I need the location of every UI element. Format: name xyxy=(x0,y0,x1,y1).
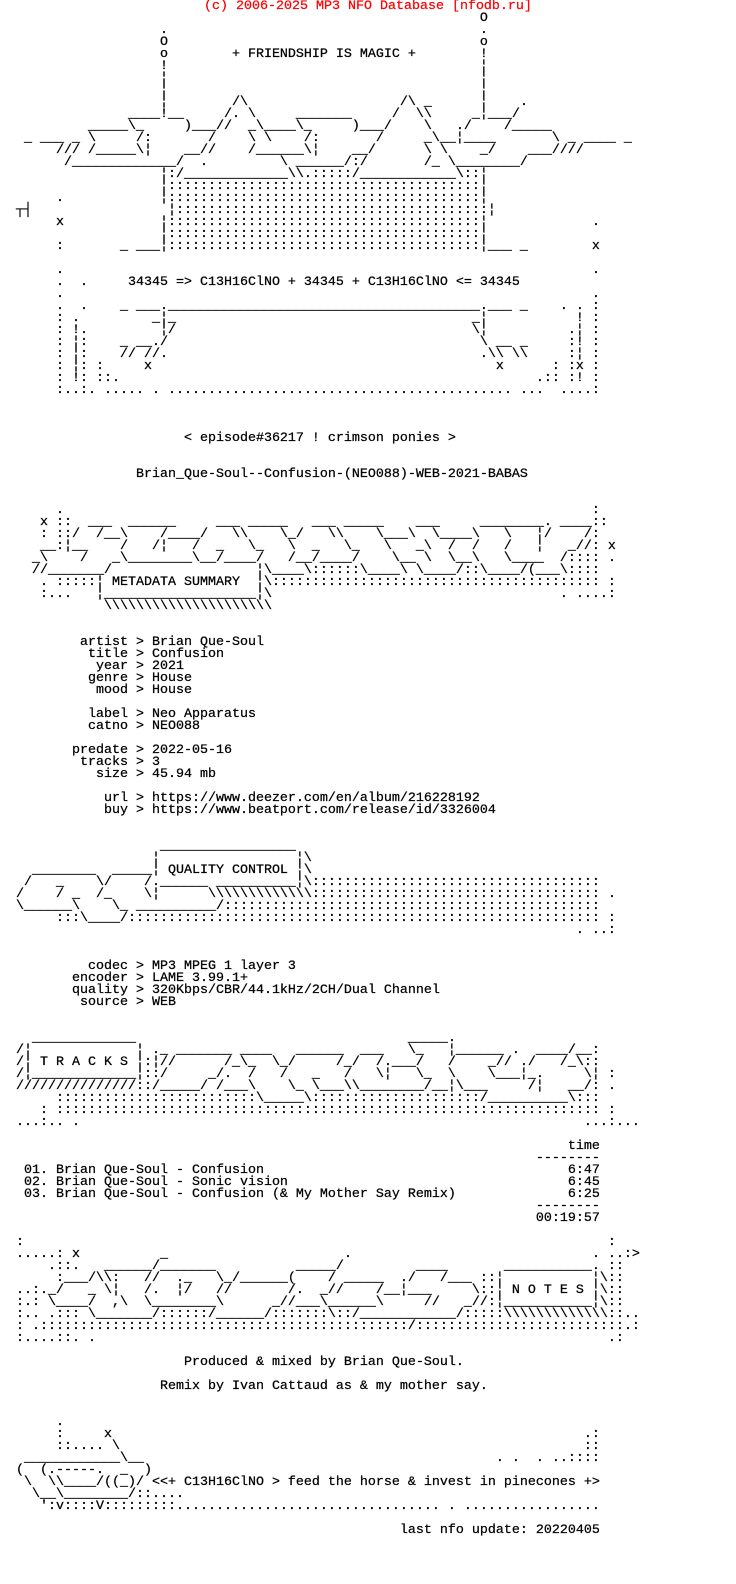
banner: metadata summary: . : x :: ___ ______ ___ _____ ___ _____ ___ ________. ____:: : ::/ /__\ /____/ \\ \_/ \\ \___\ \____\ \ ¦/ /: __:¦__ / /¦ / _ \_ \ _ \_ \ _\ / / / ¦ _//: x _\ / _\________\__/____/ /__/____/ \__ \ \__\ \____ /:::: . //_______/ ¦\____\::::::\____\ \____/::\____/(___\:::: . :::::¦ METADATA SUMMARY ¦\::::::::::::::::::::::::::::::::::::::::: : :... ¦___________________¦\ . ....: \\\\\\\\\\\\\\\\\\\\\ xyxy=(0,503,616,614)
text: last update: last nfo update: 20220405 xyxy=(400,1523,600,1538)
ascii logo: friendship is magic castle with formula: O . . O o o + FRIENDSHIP IS MAGIC + ! ! ¦ ¦ ¦ ¦ ¦ ¦ /\ /\ _ ¦ . ____!__ /. \ _______ / \\ _¦___/ _____\_ )___// _\____\_ )___/ \ ./ /_____ _ ___ _ \ /: / \ \ /: / _\__¦____ \ _ ____ _ /// /_____\¦ __// /______\¦ __/ \ \ _/ ___//// /_____________/ . \ ______/:/ /_ \________/ ¦:/_____________\\.:::::/____________\::¦ ¦:::::::::::::::::::::::::::::::::::::::¦ . ¦:::::::::::::::::::::::::::::::::::::::¦ ┬┤ ¦:::::::::::::::::::::::::::::::::::::::¦ x ¦:::::::::::::::::::::::::::::::::::::::¦ . ¦:::::::::::::::::::::::::::::::::::::::¦ : _ ___¦:::::::::::::::::::::::::::::::::::::::¦___ _ x . . . . 34345 => C13H16ClNO + 34345 + C13H16ClNO <= 34345 . . . . _ ___._______________________________________.___ _ . . : : . _¦_ _¦ ! : : !. ¦/ \¦ .¦ : : ¦: _ __./ \ __ _ :! : : ¦: // //. .\\ \\ :¦ : : ¦: : x x : :x : : !: ::. .:: :! : :..:. ..... . ........................................... ... ....: xyxy=(0,11,632,398)
quality details: codec > MP3 MPEG 1 layer 3 encoder > LAME 3.99.1+ quality > 320Kbps/CBR/44.1kHz/2CH/Dual Channel source > WEB xyxy=(0,959,440,1010)
text: release name: Brian_Que-Soul--Confusion-(NEO088)-WEB-2021-BABAS xyxy=(136,467,528,482)
banner: notes: : : .....: x _ . . ..:> .::. ______/_______ _____/ ____ ___________. :: :___/\\: // ._ \_/______( / _____ ./ /___ ::¦ ¦\:: ..:._/ _ \¦ /. ¦/ // /. _// /__¦___ \::¦ N O T E S ¦\:: :.: \____/ ,\ \________\ _//___\______\ // _//:¦___________¦\:: :.. .::: \_______/::::::/______/:::::::\::/____________/:::::\\\\\\\\\\\\\::.. : .::::::::::::::::::::::::::::::::::::::::::::::/::::::::::::::::::::::::::.: :....::. . .: xyxy=(0,1235,640,1346)
banner: quality control: _________________ ¦ ¦\ ________ _____¦ QUALITY CONTROL ¦\ / _ \/ /.______ __________¦\:::::::::::::::::::::::::::::::::::: / / _ /_ \¦ \\\\\\\\\\\\\:::::::::::::::::::::::::::::::::::: . \______\ \_ __________/::::::::::::::::::::::::::::::::::::::::::::::: :::\____/::::::::::::::::::::::::::::::::::::::::::::::::::::::::::: : . ..: xyxy=(0,839,616,938)
text: remix credit: Remix by Ivan Cattaud as & my mother say. xyxy=(160,1379,488,1394)
metadata list: artist > Brian Que-Soul title > Confusion year > 2021 genre > House mood > House label > Neo Apparatus catno > NEO088 predate > 2022-05-16 tracks > 3 size > 45.94 mb url > https://www.deezer.com/en/album/216228192 buy > https://www.beatport.com/release/id/3326004 xyxy=(0,635,496,818)
text: production credits: Produced & mixed by Brian Que-Soul. xyxy=(184,1355,464,1370)
banner: tracks: _____________ _____. /¦ ¦ ._ _______ ____ ______ ___ \_ ¦______ . ____/__: /¦ T R A C K S ¦:¦// /_\_ \_/ /_/ /.___/ / _// ./ /_\:: /¦_____________¦::/ _/. / / _ / \¦ \_ \ \___¦_. \¦ : ///////////////::/_____/ /___\ \_ \___\\________/__¦\___ /¦ __/: . :::::::::::::::::::::::::\_____\:::::::::::::::::::::/__________\::: : :::::::::::::::::::::::::::::::::::::::::::::::::::::::::::::::::::: : ...:.. . ...:... xyxy=(0,1031,640,1130)
footer ascii: pinecones and horse tagline: . : x .: ::.... \ :: ____________\__ . . . ..:::: ( (.-----. _ ) \ \\____/((_)/ <<+ C13H16ClNO > feed the horse & invest in pinecones +> \__\________/::.... ':v::::V:::::::::................................. . ................. xyxy=(0,1415,600,1514)
text: episode line: < episode#36217 ! crimson ponies > xyxy=(184,431,456,446)
track list: time -------- 01. Brian Que-Soul - Confusion 6:47 02. Brian Que-Soul - Sonic vision 6:45 03. Brian Que-Soul - Confusion (& My Mother Say Remix) 6:25 -------- 00:19:57 xyxy=(0,1139,600,1226)
